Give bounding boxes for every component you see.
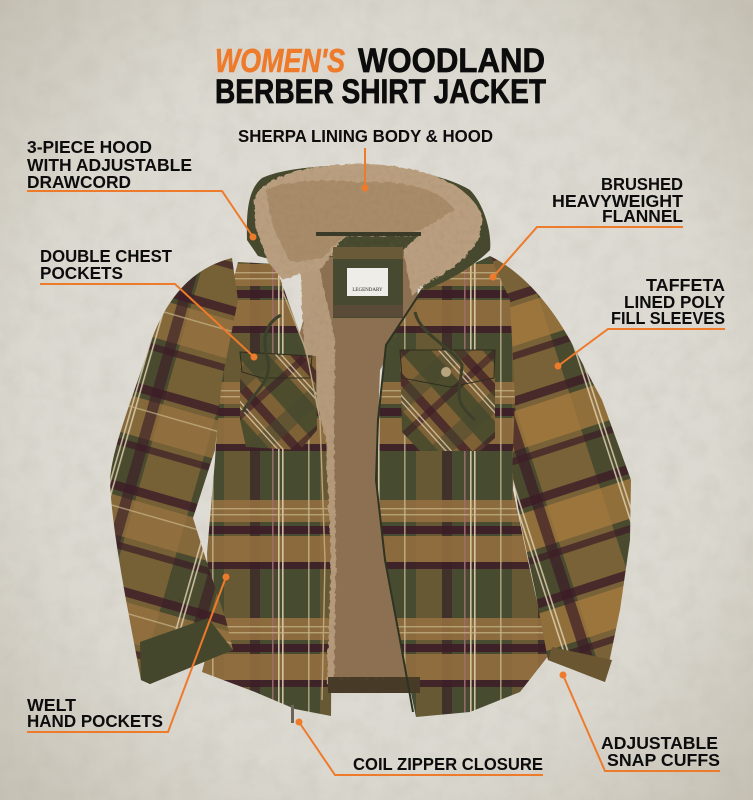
callout: sleeves: FILL SLEEVES: [611, 308, 725, 328]
callout: cuffs: ADJUSTABLE: [601, 733, 718, 753]
zipper edges: [282, 290, 422, 712]
right cuff: [548, 647, 612, 682]
neck seam: [316, 232, 421, 236]
title: WOMEN'S: [215, 42, 345, 79]
callout: zipper: [296, 718, 543, 775]
callout: sherpa lining: [238, 126, 493, 192]
callout: sleeves: TAFFETA: [646, 275, 725, 295]
callout: sleeves: [554, 275, 725, 370]
title: WOODLAND: [358, 42, 545, 80]
pocket snap: [441, 367, 451, 377]
title: BERBER SHIRT JACKET: [215, 73, 546, 111]
callout: flannel: FLANNEL: [602, 206, 683, 226]
left cuff: [140, 618, 233, 684]
callout: cuffs: [560, 672, 720, 771]
right sleeve: [490, 256, 631, 682]
callout: flannel: [490, 174, 683, 280]
callout: hood: WITH ADJUSTABLE: [27, 155, 192, 175]
brand label: [347, 268, 388, 296]
callout: hand pockets: HAND POCKETS: [27, 711, 163, 731]
right chest pocket: [400, 350, 495, 451]
callout: sherpa lining: SHERPA LINING BODY & HOOD: [238, 126, 493, 146]
left sleeve: [110, 258, 238, 684]
callout: hood: 3-PIECE HOOD: [27, 137, 152, 157]
callout: flannel: BRUSHED: [601, 174, 683, 194]
left pocket flap: [240, 352, 312, 378]
left sherpa facing: [300, 262, 336, 684]
callout: hood: DRAWCORD: [27, 172, 131, 192]
neck plaid patch: [333, 247, 403, 318]
jacket body: right front panel: [376, 256, 549, 717]
callout: chest pockets: DOUBLE CHEST: [40, 246, 172, 266]
callout: chest pockets: POCKETS: [40, 263, 123, 283]
callout: flannel: HEAVYWEIGHT: [552, 191, 683, 211]
hood inner sherpa: [266, 180, 455, 262]
hood sherpa rim: [254, 164, 482, 296]
callout: hood: [27, 137, 256, 240]
callout: cuffs: SNAP CUFFS: [607, 750, 720, 770]
callout: sleeves: LINED POLY: [624, 292, 725, 312]
callout: zipper: COIL ZIPPER CLOSURE: [353, 754, 543, 774]
jacket lining: sherpa interior: [298, 238, 418, 684]
right pocket flap: [400, 350, 495, 387]
brand label: LEGENDARY: [352, 288, 383, 293]
callout: hand pockets: [27, 574, 230, 732]
title: [215, 42, 546, 111]
callout: hand pockets: WELT: [27, 695, 76, 715]
zipper pull: [291, 705, 294, 723]
jacket body: left front panel: [202, 262, 332, 716]
jacket bottom hem strip: [328, 677, 420, 693]
hood shell: [247, 166, 490, 290]
left chest pocket: [240, 352, 317, 450]
callout: chest pockets: [40, 246, 258, 360]
sherpa texture: [254, 165, 480, 680]
illustration: flannel jacket: [110, 164, 631, 723]
drawcords: [243, 312, 475, 420]
